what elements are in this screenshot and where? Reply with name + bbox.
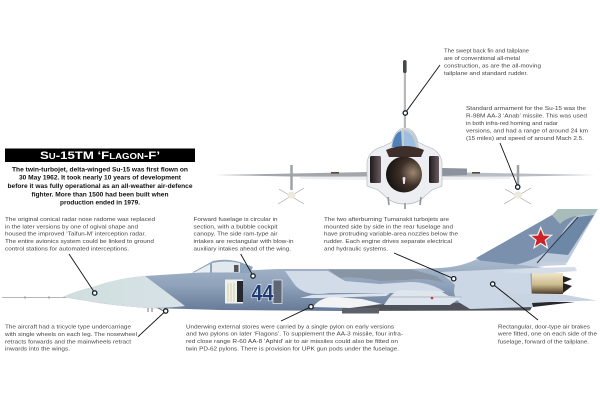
text: air brakes: Rectangular, door-type air brakes bbox=[498, 325, 590, 331]
front view: radome bbox=[386, 156, 422, 192]
text: armament: R-98M AA-3 ‘Anab’ missile. This was used bbox=[466, 113, 587, 119]
text: forward fuselage: auxiliary intakes ahead of the wing. bbox=[194, 246, 291, 252]
text: armament: versions, and had a range of around 24 km bbox=[466, 128, 588, 134]
front view: wings bbox=[215, 168, 595, 180]
front view: intakes bbox=[370, 156, 439, 183]
text: turbojets: mounted side by side in the rear fuselage and bbox=[324, 224, 453, 230]
intro text bbox=[8, 166, 193, 207]
front view aircraft bbox=[215, 60, 595, 209]
text: turbojets: rudder. Each engine drives separate electrical bbox=[324, 239, 452, 245]
text: turbojets: and hydraulic systems. bbox=[324, 246, 388, 252]
text: turbojets: have protruding variable-area nozzles below the bbox=[324, 232, 458, 238]
text: armament: Standard armament for the Su-15 was the bbox=[466, 106, 586, 112]
front view: fin bbox=[403, 60, 407, 132]
leader: armament bbox=[500, 143, 520, 189]
text: undercarriage bbox=[4, 325, 137, 353]
text: undercarriage: retracts forwards and the mainwheels retract bbox=[5, 339, 132, 345]
text: radome: The entire avionics system could be linked to ground bbox=[5, 239, 154, 245]
side view: gun pod bbox=[342, 308, 379, 314]
text: external stores: and two pylons on later ‘Flagons’. To supplement the AA-3 missile, four infra- bbox=[186, 332, 403, 338]
intro text: 30 May 1962. It took nearly 10 years of development bbox=[19, 175, 182, 182]
text: fin and tailplane: are of conventional all-metal bbox=[444, 56, 520, 62]
leader: air brakes bbox=[490, 282, 538, 320]
text: turbojets bbox=[324, 217, 458, 252]
text: external stores: Underwing external stores were carried by a single pylon on early versions bbox=[186, 324, 394, 330]
side view: number 44: 44 bbox=[252, 280, 274, 306]
text: armament bbox=[466, 106, 588, 142]
side view: missile 2 bbox=[384, 290, 462, 305]
side view: pitot probe bbox=[2, 296, 66, 299]
side view aircraft bbox=[2, 209, 598, 314]
front view: fuselage bbox=[367, 128, 442, 204]
side view: red star bbox=[530, 228, 552, 248]
text: fin and tailplane: tailplane and standard rudder. bbox=[444, 71, 528, 77]
text: external stores bbox=[186, 324, 403, 352]
text: forward fuselage: Forward fuselage is circular in bbox=[194, 217, 278, 223]
text: armament: (15 miles) and speed of around Mach 2.5. bbox=[466, 136, 585, 142]
text: radome: housed the improved ‘Taifun-M’ interception radar. bbox=[5, 232, 147, 238]
leader: turbojets bbox=[394, 253, 456, 281]
intro text: The twin-turbojet, delta-winged Su-15 was first flown on bbox=[12, 166, 188, 173]
side view: missile 1 bbox=[313, 297, 382, 308]
text: fin and tailplane: construction, as are the all-moving bbox=[444, 64, 541, 70]
text: turbojets: The two afterburning Tumanskii turbojets are bbox=[324, 217, 449, 223]
text: undercarriage: The aircraft had a tricycle type undercarriage bbox=[5, 325, 131, 331]
side view: nozzle bbox=[532, 273, 572, 294]
side view: belly shadow bbox=[343, 303, 532, 311]
side view: camouflage bbox=[285, 268, 532, 310]
front view: missiles bbox=[278, 165, 531, 204]
text: air brakes: were fitted, one on each side of the bbox=[497, 332, 597, 338]
leader: fin bbox=[403, 65, 440, 115]
intro text: before it was fully operational as an all-weather air-defence bbox=[8, 183, 193, 190]
text: forward fuselage: intakes are rectangular with blow-in bbox=[194, 239, 294, 245]
side view: tailplane bbox=[503, 293, 597, 307]
leader: radome bbox=[69, 254, 97, 295]
text: external stores: red close range R-60 AA-8 ‘Aphid’ air to air missiles could also be fitted on bbox=[186, 339, 398, 345]
side view: rear panel bbox=[273, 280, 282, 304]
text: armament: in both infra-red homing and radar bbox=[466, 121, 558, 127]
intro text: production ended in 1979. bbox=[60, 200, 140, 207]
leader: external stores bbox=[281, 304, 313, 321]
text: radome bbox=[5, 217, 155, 252]
text: fin and tailplane: The swept back fin and tailplane bbox=[444, 49, 529, 55]
side view: fuselage bbox=[63, 260, 577, 311]
front view: canopy bbox=[386, 129, 424, 157]
side view: fin bbox=[475, 209, 598, 268]
text: air brakes: fuselage, forward of the tailplane. bbox=[498, 339, 589, 345]
text: forward fuselage: section, with a bubble cockpit bbox=[194, 224, 278, 230]
text: radome: The original conical radar nose radome was replaced bbox=[5, 217, 155, 223]
side view: tail strakes bbox=[503, 262, 577, 274]
side view: intake bbox=[225, 280, 243, 304]
text: radome: control stations for automated interceptions. bbox=[5, 246, 130, 252]
front view: undercarriage bbox=[388, 197, 421, 209]
leader: undercarriage bbox=[138, 309, 168, 337]
side view: canopy bbox=[192, 260, 253, 273]
text: radome: in the later versions by one of ogival shape and bbox=[5, 224, 138, 230]
title bar: Su-15TM ‘Flagon-F’ bbox=[40, 150, 160, 162]
text: air brakes bbox=[497, 325, 597, 345]
text: undercarriage: with single wheels on each leg. The nosewheel bbox=[4, 332, 137, 338]
title bar bbox=[5, 148, 195, 162]
text: undercarriage: inwards into the wings. bbox=[5, 347, 71, 353]
text: forward fuselage: canopy. The side ram-type air bbox=[194, 232, 278, 238]
side view: nose radome bbox=[63, 276, 185, 308]
intro text: fighter. More than 1500 had been built when bbox=[32, 191, 168, 198]
text: external stores: twin PD-62 pylons. There is provision for UPK gun pods under the fuselage. bbox=[186, 346, 400, 352]
leader: forward fuselage bbox=[241, 254, 255, 278]
text: forward fuselage bbox=[194, 217, 294, 252]
side view: nose gear bbox=[148, 308, 164, 312]
text: fin and tailplane bbox=[444, 49, 541, 77]
